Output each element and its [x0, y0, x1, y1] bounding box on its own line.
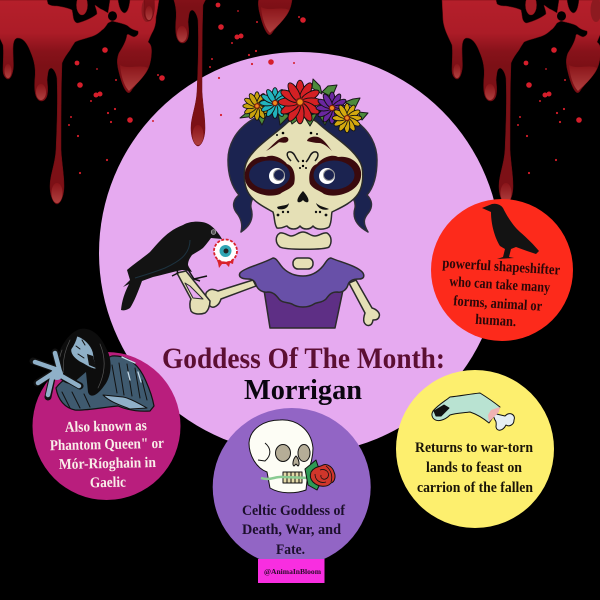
hair	[56, 329, 111, 396]
title: Goddess Of The Month:	[162, 342, 445, 375]
flower: purple	[316, 92, 348, 124]
right arm bone	[349, 280, 379, 326]
eyeball	[214, 240, 237, 262]
blood splatter: top centre	[134, 0, 306, 146]
panel: yellow carrion circle	[396, 370, 554, 528]
text: carrion: Returns to war-torn	[415, 440, 534, 456]
flower: teal	[260, 88, 290, 118]
text: shapeshifter: forms, animal or	[453, 293, 543, 315]
text: shapeshifter: human.	[475, 312, 517, 330]
hand bones	[177, 271, 210, 314]
cheek marks	[277, 203, 329, 216]
text: carrion: lands to feast on	[426, 460, 523, 476]
figure: sugar skull goddess	[177, 79, 379, 328]
left eye socket	[245, 156, 295, 196]
panel: main lilac circle	[99, 52, 501, 454]
neck bone	[293, 258, 313, 269]
gown and torso	[56, 356, 154, 411]
panel: magenta phantom queen circle	[32, 329, 180, 500]
raven feet	[172, 268, 207, 281]
text: shapeshifter: powerful shapeshifter	[442, 255, 561, 279]
text: phantom queen	[50, 418, 164, 491]
text: phantom queen: Phantom Queen" or	[50, 436, 164, 454]
credit tag: @AnimaInBloom	[264, 567, 322, 576]
flower: red	[278, 80, 322, 124]
icon: crow	[482, 204, 539, 259]
credit tag	[258, 559, 324, 583]
text: phantom queen: Also known as	[65, 418, 147, 436]
flower: yellow right	[332, 103, 362, 133]
left arm bone	[206, 280, 256, 307]
reaching hand	[33, 352, 80, 397]
face	[71, 336, 96, 369]
skull cranium	[244, 118, 363, 229]
text: celtic goddess: Celtic Goddess of	[242, 503, 346, 519]
text: carrion	[415, 440, 534, 496]
text: shapeshifter: who can take many	[449, 274, 551, 296]
bodice	[264, 290, 343, 328]
collar	[239, 258, 364, 307]
text: celtic goddess: Death, War, and	[242, 522, 342, 538]
text: phantom queen: Mór-Ríoghain in	[59, 455, 157, 473]
flower: yellow left	[243, 92, 271, 120]
leaves of flower crown	[240, 79, 368, 126]
brows and swirl	[266, 132, 332, 169]
icon: skull with rose	[249, 420, 335, 493]
nose	[297, 191, 309, 202]
text: shapeshifter	[442, 255, 561, 330]
icon: severed finger	[432, 393, 514, 430]
title	[162, 342, 445, 406]
blood splatter: top right	[442, 0, 600, 204]
lower hand	[103, 395, 147, 409]
text: celtic goddess: Fate.	[276, 542, 305, 558]
text: phantom queen: Gaelic	[90, 475, 126, 491]
raven body	[121, 222, 222, 310]
jaw	[276, 232, 331, 249]
panel: purple celtic goddess circle	[213, 408, 371, 566]
subtitle: Morrigan	[244, 374, 362, 406]
text: celtic goddess	[242, 503, 346, 558]
icon: raven with eyeball	[121, 222, 237, 310]
panel: red shapeshifter circle	[431, 199, 573, 341]
text: carrion: carrion of the fallen	[417, 480, 534, 496]
icon: phantom figure	[33, 329, 154, 411]
hair	[228, 108, 377, 232]
right eye socket	[309, 156, 361, 196]
blood splatter: top left	[0, 0, 165, 204]
